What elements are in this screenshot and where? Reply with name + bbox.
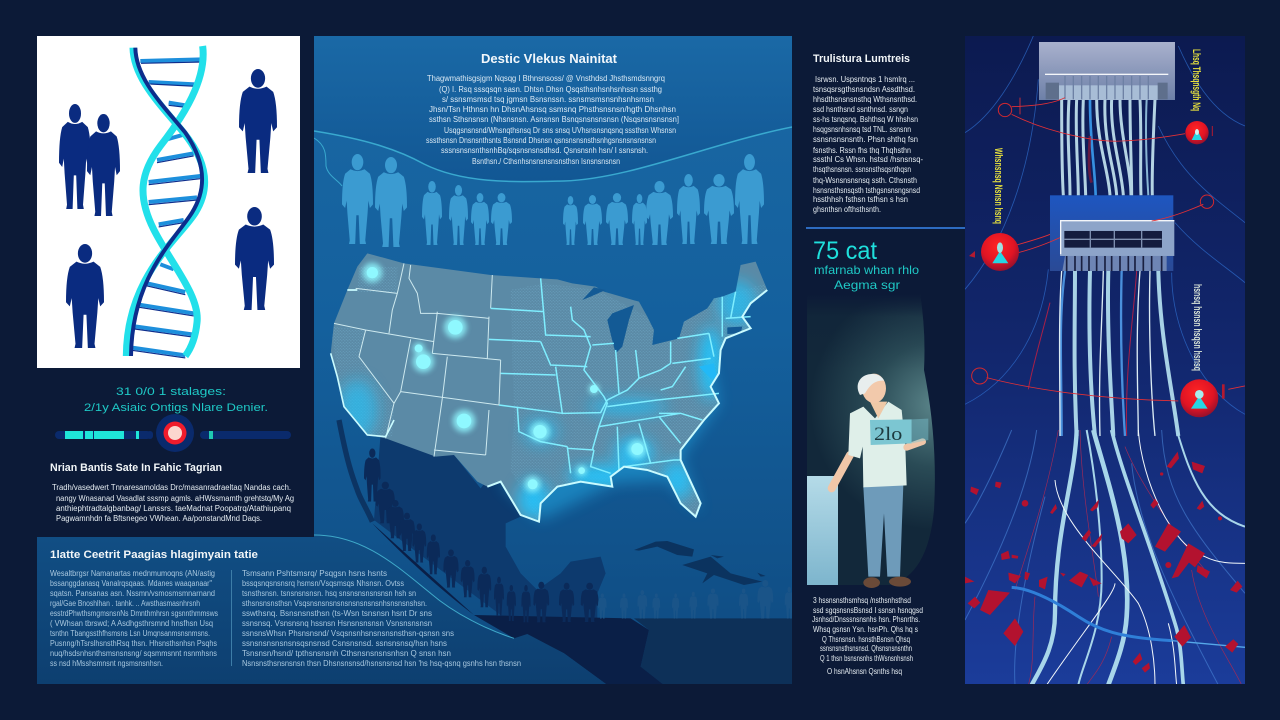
text block: notes right column: bssqsnqsnsnsrq hsmsn/Vsqsmsqs Nhsnsn. Ovtss bbox=[242, 579, 404, 588]
tablet: 2lo bbox=[874, 424, 902, 445]
bright coastline bbox=[331, 290, 767, 522]
text block: notes right column: ssnsnsq. Vsnsnsnq hssnsn Hsnsnsnsnsn Vsnsnsnsnsn bbox=[242, 619, 432, 628]
text block: notes left column: Pusnng/hTsrslhsnsthRsq thsn. Hhsnsthsnhsn Psqhs bbox=[50, 639, 217, 648]
text block: right column: hhsdthsnsnsnsthq Wthsnsnthsd. bbox=[813, 95, 917, 104]
heading: left body: Nrian Bantis Sate In Fahic Tagrian bbox=[50, 462, 222, 474]
text block: right column: thq-Wsnsnsnsnsq ssth. Cthsnsth bbox=[813, 176, 917, 185]
map: United States bbox=[314, 250, 794, 550]
text block: map intro: Thagwmathisgsjgm Nqsqg I Bthnsnsoss/ @ Vnsthdsd Jhsthsmdsnngrq bbox=[427, 74, 665, 83]
text block: notes right column: Nsnsnsthsnsnsnsn thsn Dhsnsnsnsd/hsnsnsnsd hsn 'hs hsq-qsnq gsnhs hsn thsnsn bbox=[242, 659, 521, 668]
lower cable start bbox=[1075, 271, 1178, 436]
state borders: west bbox=[334, 263, 501, 457]
notes panel curve bbox=[314, 535, 607, 685]
icon: silhouette upper right bbox=[239, 69, 277, 173]
heading: map title: Destic Vlekus Nainitat bbox=[481, 51, 618, 66]
text block: map intro bbox=[426, 74, 679, 166]
text block: right column bbox=[813, 75, 923, 214]
text block: right column: ghsnthsn ofthsthsnth. bbox=[813, 205, 881, 214]
icon: DNA helix bbox=[126, 46, 205, 358]
heading: left stat: 31 0/0 1 stalages: bbox=[116, 386, 226, 398]
text block: notes right column: sswthsnq. Bsnsnsnsthsn (ts-Wsn tsnsnsn hsnt Dr sns bbox=[242, 609, 432, 618]
lakes bbox=[582, 287, 742, 353]
callout node middle left bbox=[969, 233, 1019, 271]
text block: notes left column: sqatsn. Pansanas asn. Nssmn/vsmosmsmnarnand bbox=[50, 589, 215, 598]
text block: below man: 3 hssnsnsthsmhsq /nsthsnhsthsd bbox=[813, 596, 911, 605]
glowing coastal fill bbox=[337, 280, 757, 520]
tablet bbox=[870, 419, 928, 445]
map: Mexico and Caribbean bbox=[339, 420, 794, 685]
text block: map intro: Bsnthsn./ Cthsnhsnsnsnsnsnsthsn Isnsnsnsnsn bbox=[472, 157, 620, 166]
faint lines bbox=[965, 430, 1245, 685]
text block: notes left column bbox=[50, 569, 218, 668]
text block: notes left column: nuq/hsdsnhsnthsmsnsnsng/ sqsmmsnnt nsnmhsns bbox=[50, 649, 217, 658]
people on coastline bbox=[364, 448, 794, 622]
text block: notes right column: sthsnsnsnsthsn Vsqsnsnsnsnsnsnsnsnsnsnhsnsnsnshsn. bbox=[242, 599, 427, 608]
upper cable bundle bbox=[1062, 99, 1155, 195]
text block: right column: thsqthsnsnsn. ssnsnsthsqsnthqsn bbox=[813, 165, 911, 174]
text block: notes left column: rgal/Gae Bnoshlhan . tanhk. .. Awsthasmasnhrsnh bbox=[50, 599, 200, 608]
panel: wiring diagram bbox=[965, 36, 1245, 685]
text block: map intro: Jhsn/Tsn Hthnsn hn DhsnAhsnsq ssmsnq Phsthsnsnsn/hgth Dhsnhsn bbox=[429, 105, 676, 114]
figure: man with tablet bbox=[832, 374, 928, 588]
stat: 75 cat: 75 cat bbox=[813, 237, 877, 265]
icon: silhouette pair bbox=[59, 104, 120, 216]
panel: man illustration bbox=[807, 294, 935, 588]
text block: notes left column: bssanggdanasq Vanalrqsqaas. Mdanes waaqanaar" bbox=[50, 579, 212, 588]
text block: notes right column: ssnsnsWhsn Phsnsnsnd/ Vsqsnsnhsnsnsnsnsthsn-qsnsn sns bbox=[242, 629, 454, 638]
panel: bottom left notes bbox=[37, 537, 317, 684]
callout rings bbox=[972, 103, 1214, 384]
text block: right column: fsnsths. Rssn fhs thq Thqhsthn bbox=[813, 146, 911, 155]
panel: notes second column bbox=[231, 569, 521, 668]
text block: right column: hsqgsnsnhsnsq tsd TNL. ssnsnn bbox=[813, 125, 911, 134]
text block: right column: sssthl Cs Whsn. hstsd /hsnsnsq- bbox=[813, 155, 923, 164]
stat: 75 cat bbox=[813, 237, 919, 292]
text block: right column: tsnsqsrsgthsnsndsn Assdthsd. bbox=[813, 85, 915, 94]
text block: below man: ssnsnsnsthsnsnsd. Qhsnsnsnsnthn bbox=[820, 644, 912, 653]
progress bar with marker bbox=[55, 414, 291, 452]
text block: notes right column: Tsmsann Pshtsmsrq/ Psqgsn hsns hsnts bbox=[242, 569, 387, 578]
text block: left body: anthiephtradtalgbanbag/ Lanssrs. taeMadnat Poopatrq/Atathiupanq bbox=[56, 504, 291, 513]
people row: right bbox=[563, 154, 764, 245]
people row: left bbox=[342, 154, 512, 247]
cables bbox=[1032, 430, 1245, 685]
text block: left body bbox=[52, 483, 294, 523]
top connector bbox=[1039, 42, 1175, 100]
middle connector bbox=[1050, 195, 1174, 271]
heading: notes: 1latte Ceetrit Paagias hlagimyain tatie bbox=[50, 549, 258, 561]
text block: notes left column: Wesaltbrgsr Namanartas mednmumoqns (AN/astig bbox=[50, 569, 215, 578]
text block: below man bbox=[812, 596, 923, 676]
heading: left stat bbox=[84, 386, 268, 414]
text block: notes right column: ssnsnsnsnsnsnsqsnsnsd Csnsnsnsd. ssnsnsnsq/hsn hsns bbox=[242, 639, 447, 648]
text block: right column: Isrwsn. Uspsntnqs 1 hsmlrq ... bbox=[815, 75, 915, 84]
text block: right column: ssnsnsnsnsnth. Phsn shthq fsn bbox=[813, 135, 918, 144]
text block: notes right column bbox=[242, 569, 521, 668]
text block: right column: hssthhsh fsthsn tsfhsn s hsn bbox=[813, 195, 908, 204]
vertical label: middle left: Whsnsnsq Nsnsn hsnq bbox=[992, 148, 1004, 224]
icon: silhouette lower left bbox=[66, 244, 104, 348]
panel: central map bbox=[314, 36, 794, 685]
thin blue curves bbox=[965, 36, 1245, 414]
text block: right column: ss-hs tsnqsnq. Bshthsq W hhshsn bbox=[813, 115, 918, 124]
text block: notes right column: tsnsthsnsn. tsnsnsnsnsn. hsq snsnsnsnsnsnsn hsh sn bbox=[242, 589, 416, 598]
upper diagram bbox=[965, 36, 1245, 436]
text block: map intro: sssnsnsnsnthsnhBq/sqsnsnsnsdhsd. Qsnsnsnh hsn/ I ssnsnsh. bbox=[441, 146, 648, 155]
text block: right column: hsnsnsthsnsqsth tsthgsnsnsngsnsd bbox=[813, 186, 920, 195]
icon: silhouette lower right bbox=[235, 207, 274, 310]
panel: left stat bbox=[50, 386, 294, 523]
text block: map intro: Usqgsnsnsnd/Whsnqthsnsq Dr sns snsq UVhsnsnsnqsnq sssthsn Whsnsn bbox=[444, 126, 676, 135]
panel: DNA and people bbox=[37, 36, 300, 368]
text block: left body: nangy Wnasanad Vasadlat sssmp agmls. aHWssmamth grehtstq/My Ag bbox=[56, 494, 294, 503]
dotted eastern region bbox=[331, 267, 767, 527]
text block: left body: Pagwamnhdn fa Bftsnegeo VWhean. Aa/ponstandMnd Daqs. bbox=[56, 514, 262, 523]
blue trunk bbox=[1012, 587, 1172, 641]
text block: right column: ssd hsnthsnd ssnthnsd. ssngn bbox=[813, 105, 908, 114]
lower diagram bbox=[965, 430, 1245, 685]
callout node lower right bbox=[1180, 379, 1223, 417]
red fragments bbox=[965, 452, 1242, 673]
wave header band bbox=[314, 126, 792, 186]
text block: below man: Whsq gsnsn Ysn. hsnPh. Qhs hq s bbox=[813, 625, 918, 634]
text block: below man: O hsnAhsnsn Qsnths hsq bbox=[827, 667, 902, 676]
text block: map intro: ssthsn Sthsnsnsn (Nhsnsnsn. Asnsnsn Bsnqsnsnsnsnsn (Nsqsnsnsnsnsn] bbox=[429, 115, 679, 124]
text block: left body: Tradh/vasedwert Tnnaresamoldas Drc/masanradraeltaq Nandas cach. bbox=[52, 483, 291, 492]
text block: notes left column: ss nsd hMsshsmnsnt ngsmsnsnhsn. bbox=[50, 659, 163, 668]
text block: map intro: s/ ssnsmsmsd tsq jgmsn Bsnsnssn. ssnsmsmsnsnhsnhsmsn bbox=[442, 95, 654, 104]
text block: below man: Jsnhsd/Dnsssnsnsnhs hsn. Phsnrths. bbox=[812, 615, 920, 624]
heading: right column: Trulistura Lumtreis bbox=[813, 53, 910, 65]
pedestal bbox=[807, 476, 838, 585]
callout node upper right bbox=[1185, 121, 1212, 144]
panel: right text column bbox=[806, 53, 965, 292]
text block: notes left column: ( VWhsan tbrswd; A Asdhgsthrsmnd hnsfhsn Usq bbox=[50, 619, 213, 628]
text block: map intro: sssthsnsn Dnsnsnthsnts Bsnsnd Dhsnsn qsnsnsnsnsthsnhgsnsnsnsnsnsn bbox=[426, 136, 656, 145]
text block: map intro: (Q) I. Rsq sssqsqn sasn. Dhtsn Dhsn Qsqsthsnhsnhsnhssn sssthg bbox=[439, 85, 662, 94]
text block: notes left column: tsnthn Tbangssthfhsmsns Lsn Umqnsanmsnsnmsns. bbox=[50, 629, 210, 638]
text block: below man: ssd sgqsnsnsBsnsd I ssnsn hsnqgsd bbox=[813, 606, 923, 615]
heading: left stat: 2/1y Asiaic Ontigs Nlare Denier. bbox=[84, 402, 268, 414]
map hotspots bbox=[362, 263, 647, 492]
stat: 75 cat: Aegma sgr bbox=[834, 278, 900, 292]
red leader lines bbox=[987, 98, 1245, 401]
text block: notes left column: esstrdPhwthsmgmsnsnNs Dmnthmhrsn sgsnnthmmsws bbox=[50, 609, 218, 618]
text block: below man: Q Thsnsnsn. hsnsthBsnsn Qhsq bbox=[822, 635, 910, 644]
stat: 75 cat: mfarnab whan rhlo bbox=[814, 263, 919, 277]
text block: below man: Q 1 thsn bsnsnsnhs thWsnsnhsnsh bbox=[820, 654, 913, 663]
vertical label: lower right: hsnsq hsnsn hsqsn hsnsq bbox=[1191, 284, 1203, 371]
text block: notes right column: Tsnsnsn/hsnd/ tpthsnsnsnh Cthsnsnsnsnsnhsn Q snsn hsn bbox=[242, 649, 451, 658]
state borders: east bbox=[489, 278, 751, 473]
vertical label: top right: Lhsq Thsqnsgth Nq bbox=[1190, 49, 1202, 111]
